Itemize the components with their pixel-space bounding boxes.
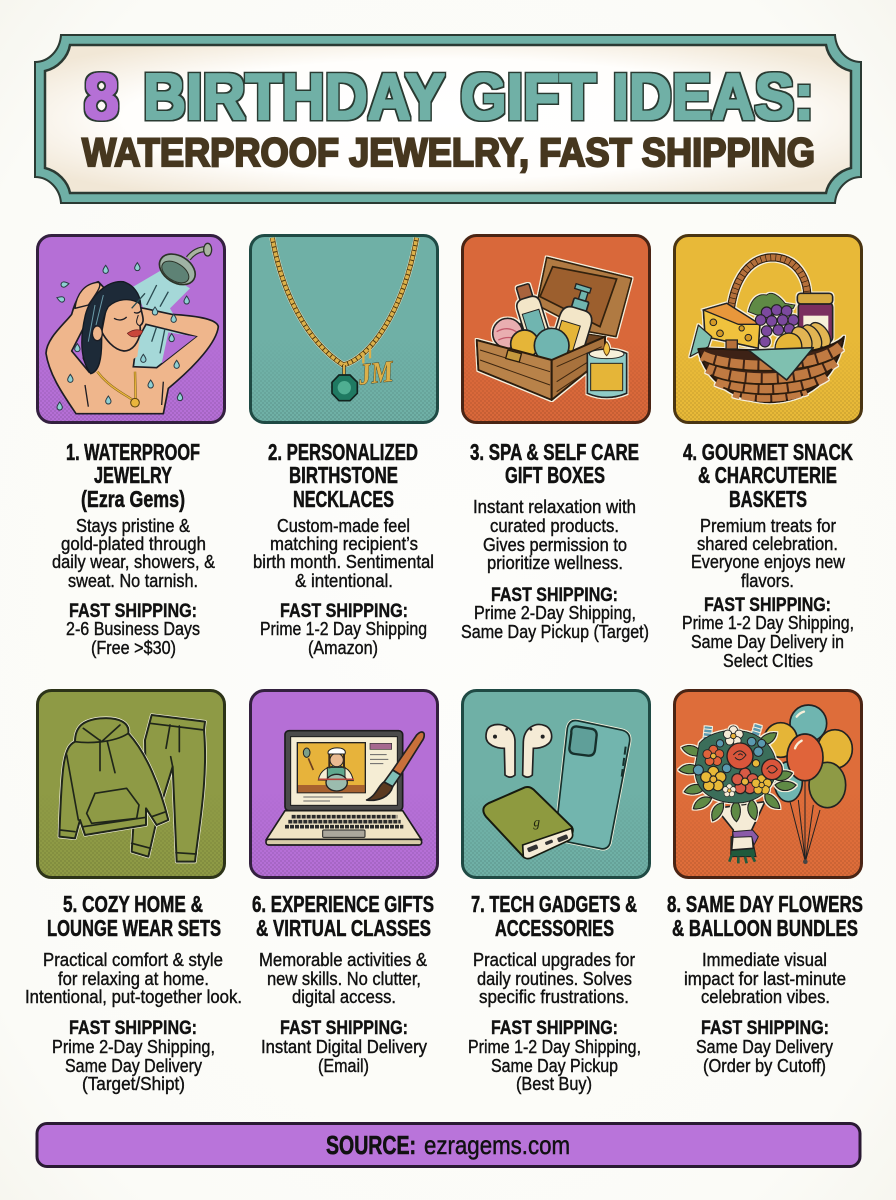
description 7 — [473, 950, 635, 1007]
description 1: Stays pristine & — [76, 516, 190, 536]
heading 5: LOUNGE WEAR SETS — [47, 915, 221, 941]
shipping 8 — [696, 1018, 833, 1076]
description 6 — [259, 950, 427, 1007]
description 3 — [473, 497, 636, 573]
shipping 2: Prime 1-2 Day Shipping — [260, 619, 427, 639]
description 4: shared celebration. — [697, 534, 838, 554]
title banner — [35, 35, 861, 203]
description 2: & intentional. — [295, 571, 393, 591]
heading 6: 6. EXPERIENCE GIFTS — [252, 891, 434, 917]
panel illustration: earbuds, phone case, power bank: g — [533, 815, 540, 830]
shipping 5: FAST SHIPPING: — [69, 1018, 197, 1039]
description 3: Gives permission to — [483, 535, 627, 555]
card 5: lounge wear — [25, 690, 242, 1094]
description 8: Immediate visual — [702, 950, 827, 970]
shipping 3: FAST SHIPPING: — [491, 585, 618, 606]
source bar — [37, 1124, 860, 1166]
shipping 4: Prime 1-2 Day Shipping, — [682, 613, 854, 633]
description 1: sweat. No tarnish. — [68, 571, 198, 591]
description 7: Practical upgrades for — [473, 950, 635, 970]
shipping 1 — [66, 601, 200, 658]
panel illustration: necklace: JM — [356, 355, 396, 392]
card 6: experience gifts — [250, 690, 438, 1076]
description 8: impact for last-minute — [684, 969, 846, 989]
card 2: birthstone necklaces — [250, 236, 438, 658]
description 5 — [25, 950, 242, 1007]
heading 2: NECKLACES — [293, 486, 394, 512]
shipping 7: (Best Buy) — [516, 1074, 592, 1094]
source bar: ezragems.com — [424, 1130, 570, 1160]
description 5: for relaxing at home. — [58, 969, 209, 989]
description 6: digital access. — [292, 987, 396, 1007]
shipping 7: FAST SHIPPING: — [491, 1018, 618, 1039]
card 3: spa gift boxes — [461, 236, 650, 642]
heading 2 — [268, 439, 418, 512]
shipping 3: Prime 2-Day Shipping, — [474, 603, 636, 623]
card 8: flowers and balloons — [667, 690, 863, 1076]
shipping 5: Same Day Delivery — [65, 1056, 202, 1076]
heading 2: BIRTHSTONE — [289, 462, 398, 488]
shipping 1: 2-6 Business Days — [66, 619, 200, 639]
description 3: curated products. — [490, 516, 619, 536]
shipping 2: (Amazon) — [308, 638, 378, 658]
description 4 — [691, 516, 846, 591]
shipping 2: FAST SHIPPING: — [280, 601, 408, 622]
panel illustration: snack basket — [674, 236, 862, 422]
shipping 4: FAST SHIPPING: — [704, 595, 831, 616]
heading 4 — [683, 439, 853, 512]
heading 7: ACCESSORIES — [495, 915, 614, 941]
description 3: prioritize wellness. — [487, 553, 623, 573]
shipping 4: Same Day Delivery in — [691, 632, 844, 652]
shipping 2 — [260, 601, 427, 658]
panel illustration: spa box — [462, 236, 650, 422]
shipping 5 — [52, 1018, 215, 1094]
shipping 5: (Target/Shipt) — [82, 1074, 185, 1094]
shipping 6 — [261, 1018, 427, 1076]
shipping 4: Select CIties — [723, 651, 813, 671]
description 8 — [684, 950, 846, 1007]
source bar: SOURCE: — [326, 1130, 416, 1160]
shipping 7 — [468, 1018, 641, 1094]
description 2: Custom-made feel — [277, 516, 410, 536]
shipping 3 — [461, 585, 649, 642]
description 4: Everyone enjoys new — [691, 552, 846, 572]
heading 4: & CHARCUTERIE — [698, 462, 837, 488]
shipping 6: (Email) — [318, 1056, 369, 1076]
heading 6 — [252, 891, 434, 941]
heading 5 — [47, 891, 221, 941]
panel illustration: woman in shower — [38, 236, 224, 422]
shipping 1: (Free >$30) — [91, 638, 176, 658]
shipping 7: Prime 1-2 Day Shipping, — [468, 1037, 641, 1057]
heading 8 — [667, 891, 863, 941]
shipping 6: Instant Digital Delivery — [261, 1037, 427, 1057]
description 4: flavors. — [741, 571, 794, 591]
description 2 — [253, 516, 434, 591]
heading 1 — [66, 439, 200, 512]
card 1: waterproof jewelry — [38, 236, 224, 658]
panel illustration: necklace — [250, 236, 438, 422]
description 1 — [52, 516, 215, 591]
shipping 5: Prime 2-Day Shipping, — [52, 1037, 215, 1057]
heading 3: 3. SPA & SELF CARE — [470, 439, 639, 465]
title line two: WATERPROOF JEWELRY, FAST SHIPPING — [82, 131, 815, 175]
panel illustration: earbuds, phone case, power bank — [462, 690, 650, 878]
shipping 6: FAST SHIPPING: — [280, 1018, 408, 1039]
heading 1: (Ezra Gems) — [81, 486, 185, 512]
description 8: celebration vibes. — [701, 987, 830, 1007]
description 2: birth month. Sentimental — [253, 552, 434, 572]
shipping 7: Same Day Pickup — [491, 1056, 618, 1076]
heading 7 — [471, 891, 637, 941]
heading 2: 2. PERSONALIZED — [268, 439, 418, 465]
panel illustration: bouquet and balloons — [674, 690, 862, 878]
panel illustration: laptop class and paintbrush — [250, 690, 438, 878]
card 4: gourmet baskets — [674, 236, 862, 671]
description 5: Practical comfort & style — [43, 950, 223, 970]
description 2: matching recipient’s — [270, 534, 418, 554]
heading 1: JEWELRY — [94, 462, 172, 488]
description 7: specific frustrations. — [479, 987, 629, 1007]
heading 3: GIFT BOXES — [505, 462, 605, 488]
heading 5: 5. COZY HOME & — [63, 891, 203, 917]
shipping 3: Same Day Pickup (Target) — [461, 622, 649, 642]
shipping 8: FAST SHIPPING: — [701, 1018, 829, 1039]
shipping 8: (Order by Cutoff) — [703, 1056, 826, 1076]
title line one: BIRTHDAY GIFT IDEAS: — [143, 60, 814, 133]
heading 6: & VIRTUAL CLASSES — [256, 915, 431, 941]
description 3: Instant relaxation with — [473, 497, 636, 517]
description 5: Intentional, put-together look. — [25, 987, 242, 1007]
heading 4: BASKETS — [729, 486, 807, 512]
card 7: tech gadgets — [462, 690, 650, 1094]
description 7: daily routines. Solves — [477, 969, 632, 989]
shipping 4 — [682, 595, 854, 671]
description 1: gold-plated through — [61, 534, 206, 554]
panel illustration: hoodie and joggers — [38, 690, 224, 878]
heading 3 — [470, 439, 639, 488]
shipping 1: FAST SHIPPING: — [69, 601, 197, 622]
heading 7: 7. TECH GADGETS & — [471, 891, 637, 917]
description 6: new skills. No clutter, — [267, 969, 421, 989]
title line one: 8 — [84, 60, 119, 133]
heading 1: 1. WATERPROOF — [66, 439, 200, 465]
description 4: Premium treats for — [700, 516, 836, 536]
shipping 8: Same Day Delivery — [696, 1037, 833, 1057]
description 6: Memorable activities & — [259, 950, 427, 970]
description 1: daily wear, showers, & — [52, 552, 215, 572]
